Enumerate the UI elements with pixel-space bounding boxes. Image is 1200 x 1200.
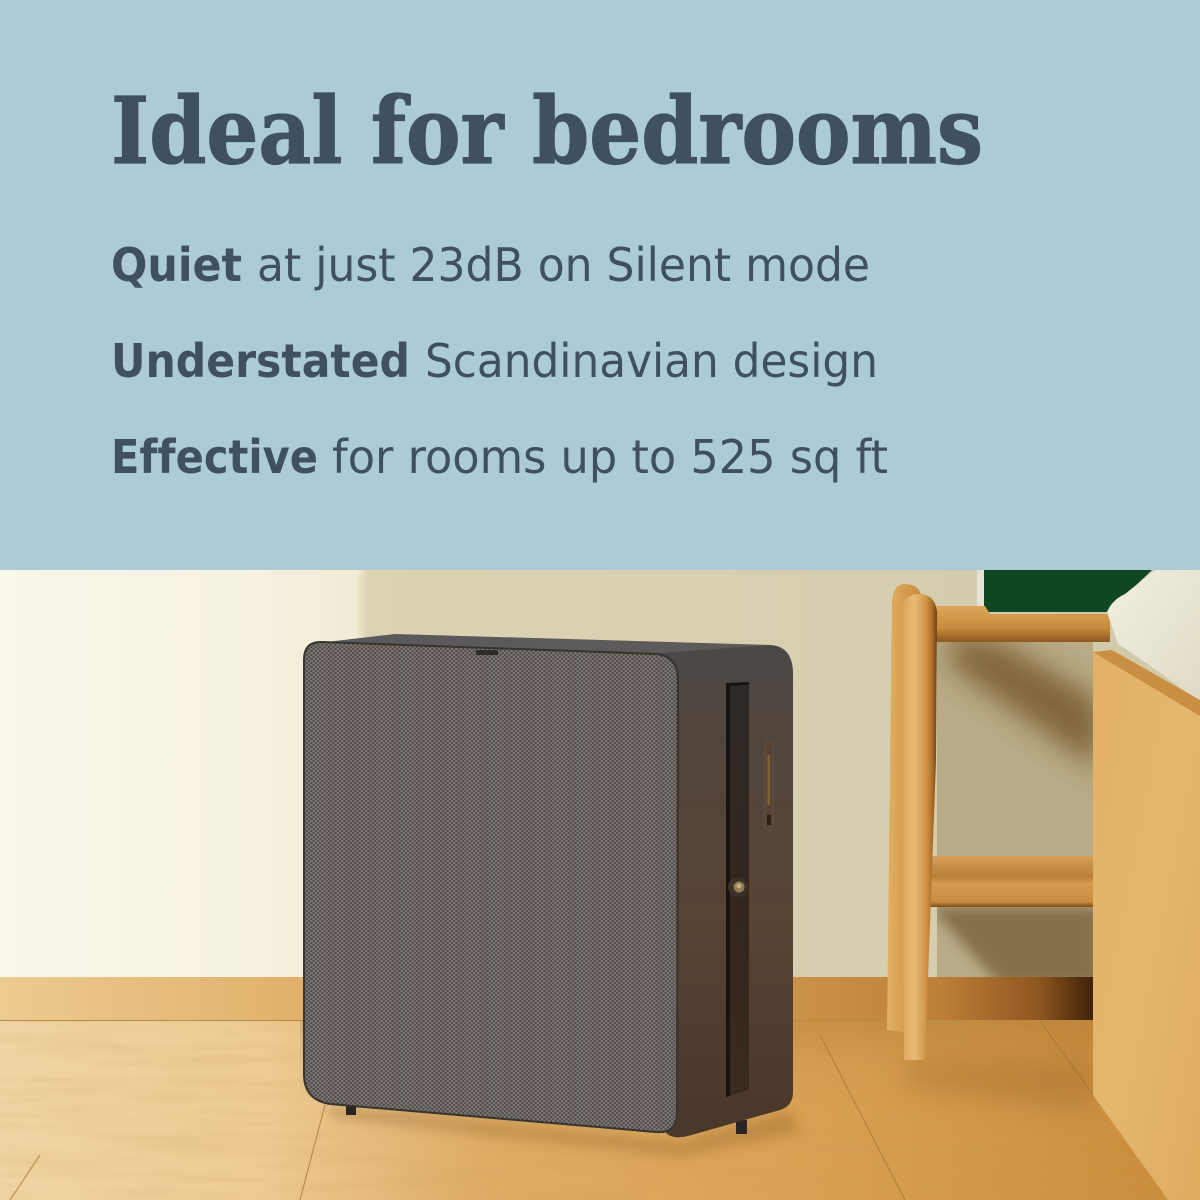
benefit: quiet: Quiet: [111, 238, 242, 292]
benefit: design: Understated: [111, 334, 410, 388]
wooden floor: [0, 1021, 1200, 1200]
air purifier: [304, 634, 793, 1137]
panel: bedroom scene: [0, 570, 1200, 1200]
purifier: indicator strip: [765, 741, 773, 831]
bedding: [1107, 570, 1200, 702]
benefit: coverage: Effective: [111, 430, 318, 484]
bed: [1093, 570, 1200, 1200]
purifier: side slot: [726, 682, 749, 1097]
benefit: design: [111, 334, 878, 388]
benefit: quiet: at just 23dB on Silent mode: [257, 238, 870, 292]
purifier: side body: [660, 645, 793, 1137]
wall: [0, 570, 1200, 978]
benefit: design: Scandinavian design: [425, 334, 878, 388]
skirting board: [0, 977, 1200, 1022]
purifier: front grille: [304, 642, 678, 1132]
text block: benefit list: [111, 238, 888, 484]
bed frame: [1093, 652, 1200, 1200]
panel: blue text background: [0, 0, 1200, 570]
purifier: top face: [318, 634, 772, 660]
green box on table: [977, 570, 1152, 612]
table: front leg: [902, 594, 937, 1060]
table: rear leg: [887, 584, 921, 1032]
table: lower shelf: [930, 856, 1094, 907]
table: top shelf: [935, 606, 1110, 642]
benefit: coverage: for rooms up to 525 sq ft: [332, 430, 888, 484]
wall shadow under table: [937, 642, 1093, 977]
bedside table: [887, 584, 1110, 1060]
purifier: feet: [346, 1103, 747, 1134]
purifier: top handle notch: [476, 650, 498, 655]
title: Ideal for bedrooms: [111, 77, 983, 185]
purifier: control dial: [728, 877, 748, 897]
